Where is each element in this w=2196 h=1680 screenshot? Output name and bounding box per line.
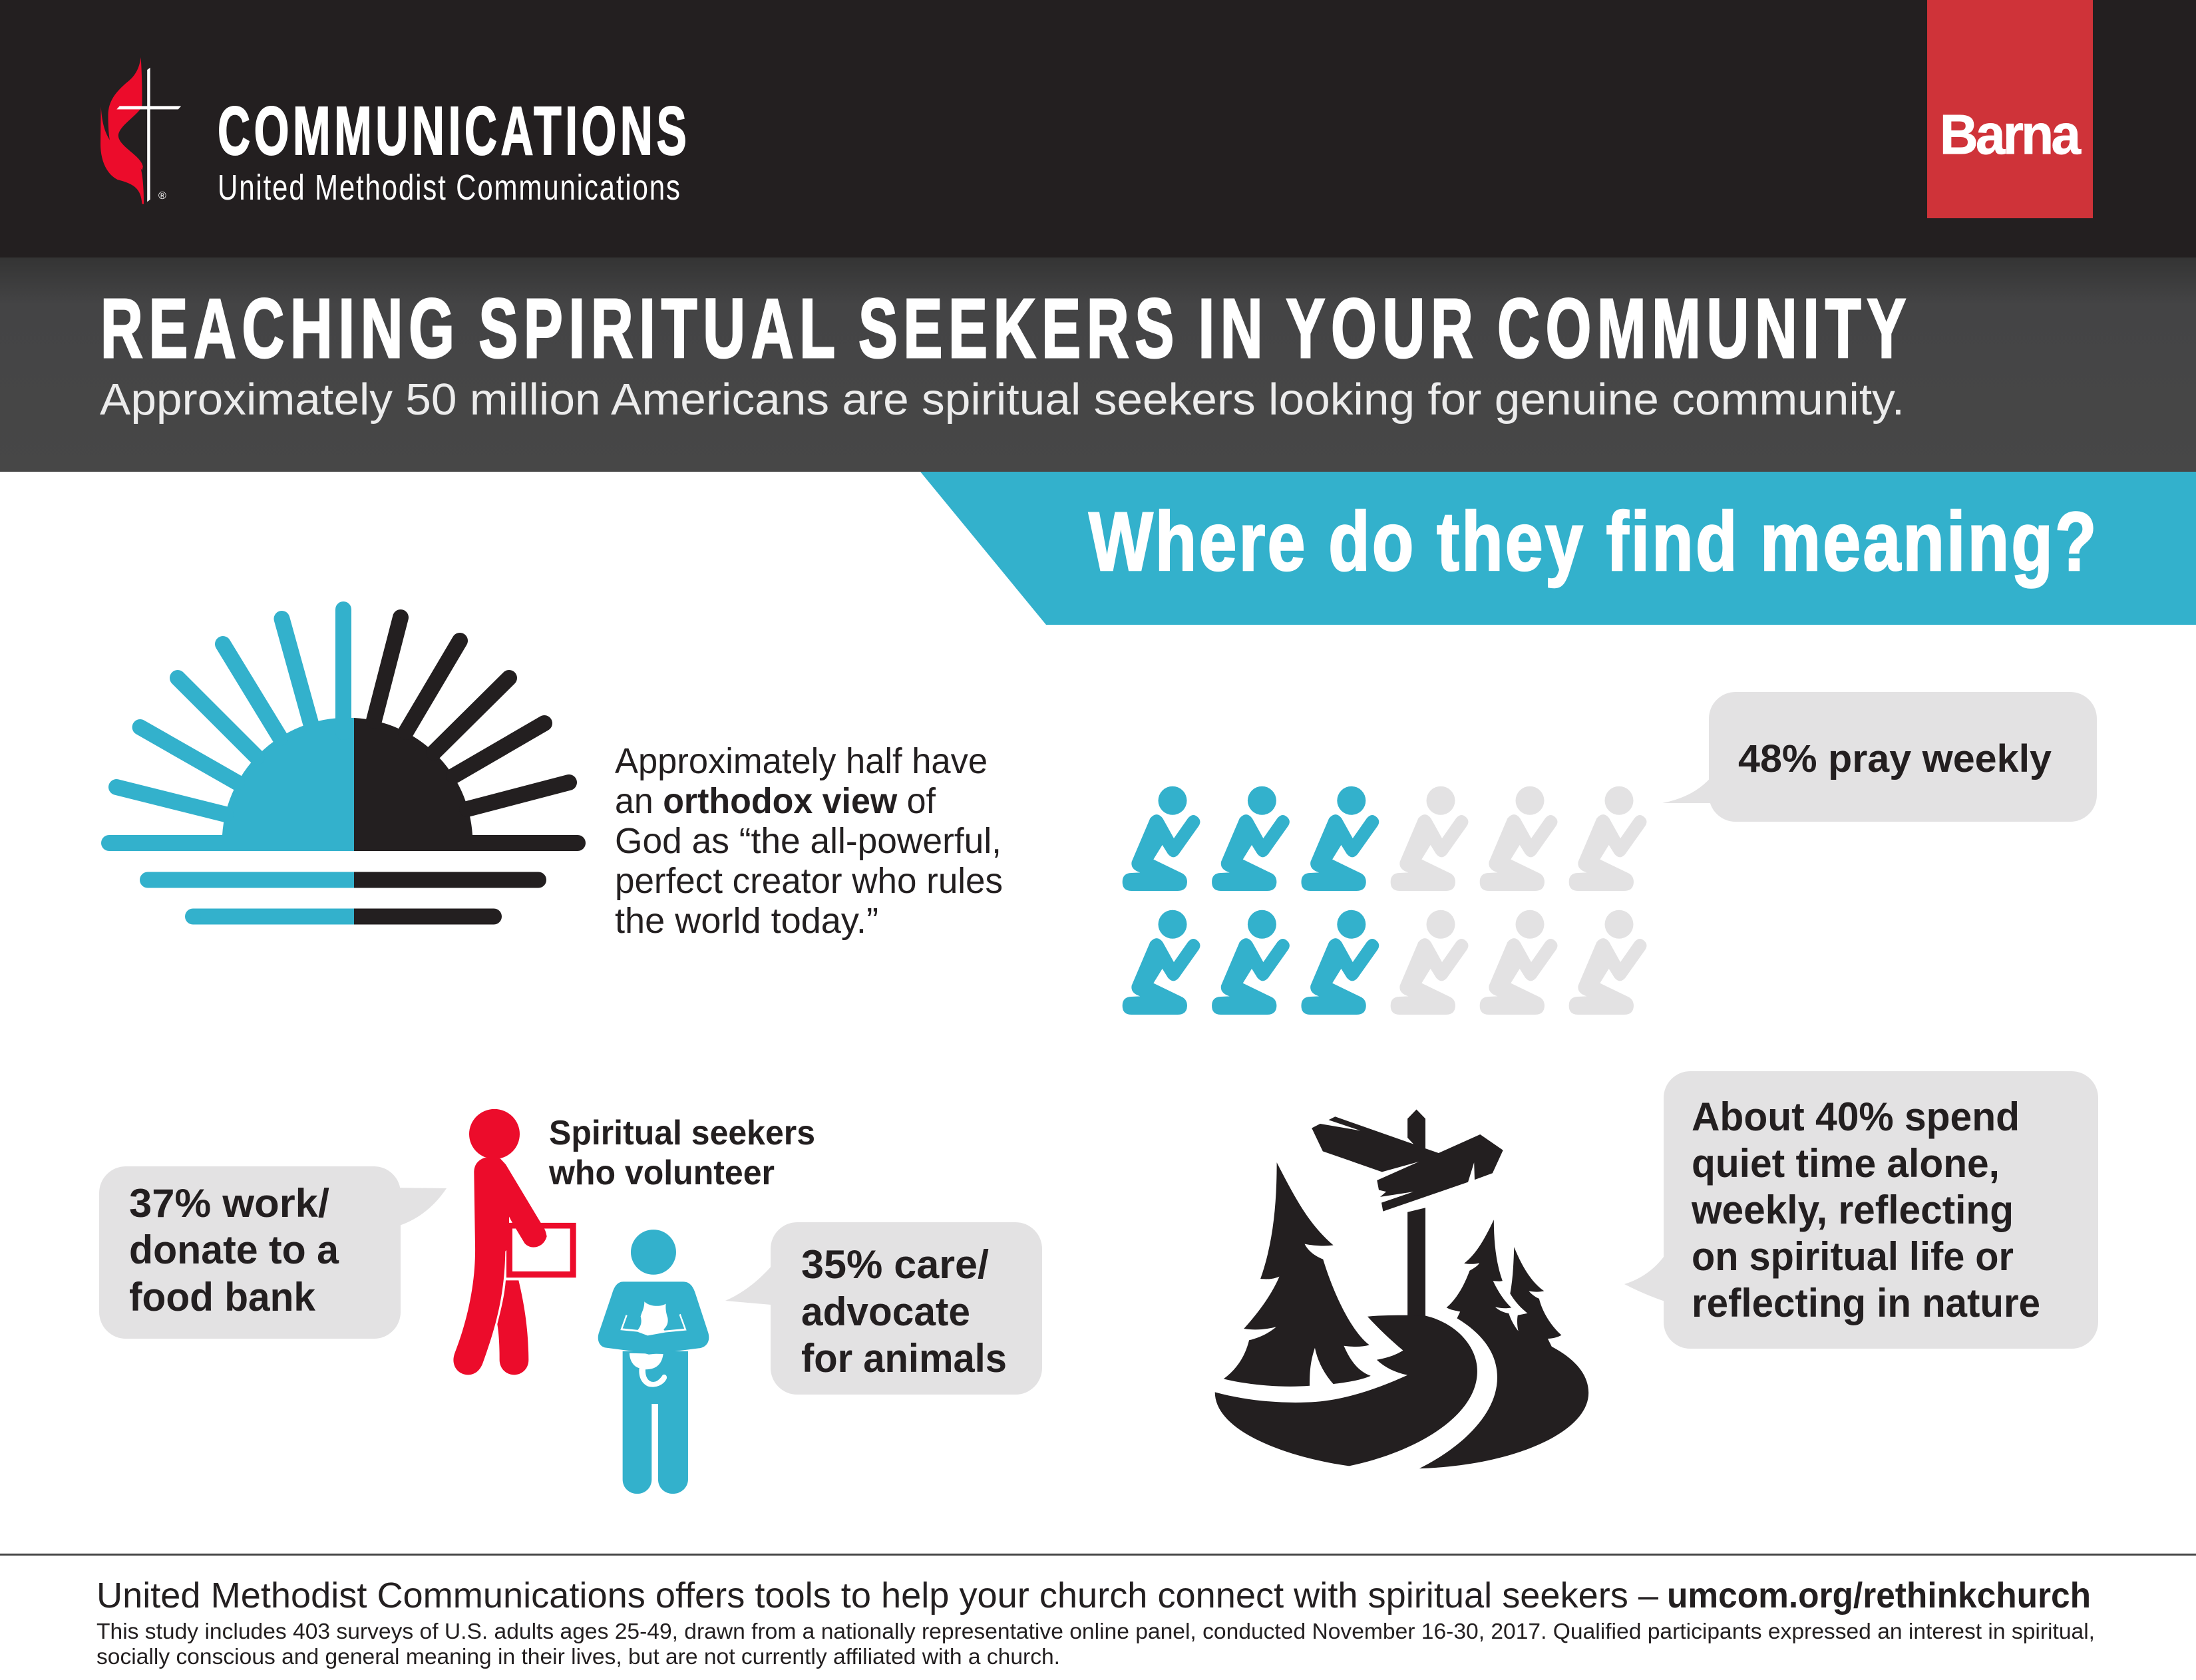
footnote bbox=[96, 1619, 2095, 1669]
footer link: umcom.org/rethinkchurch bbox=[1667, 1576, 2091, 1615]
callout: 40% quiet time: on spiritual life or bbox=[1692, 1234, 2014, 1279]
heading: seekers who volunteer: Spiritual seekers bbox=[549, 1114, 815, 1152]
title band bbox=[0, 257, 2196, 472]
callout: 37% food bank: donate to a bbox=[129, 1228, 339, 1272]
heading: seekers who volunteer: who volunteer bbox=[548, 1154, 775, 1192]
footer bbox=[0, 1554, 2196, 1669]
footnote: This study includes 403 surveys of U.S. adults ages 25-49, drawn from a nationally representative online panel, conducted November 16-30, 2017. Qualified participants expressed an interest in spiritual, bbox=[96, 1619, 2095, 1643]
callout: 35% animals: for animals bbox=[801, 1336, 1007, 1381]
Barna badge: Barna bbox=[1940, 104, 2082, 166]
text block: orthodox view of God: Approximately half have bbox=[615, 741, 988, 781]
text block: orthodox view of God bbox=[615, 741, 1003, 941]
callout: 40% quiet time: About 40% spend bbox=[1692, 1094, 2020, 1139]
footnote: socially conscious and general meaning in their lives, but are not currently affiliated with a church. bbox=[96, 1644, 1060, 1669]
callout: 35% animals: 35% care/ bbox=[801, 1242, 989, 1287]
icon: half teal half black sun bbox=[101, 609, 586, 925]
header bar bbox=[0, 0, 2196, 257]
callout: 37% food bank: 37% work/ bbox=[129, 1181, 329, 1226]
callout: 35% animals: advocate bbox=[801, 1289, 970, 1334]
icon: red volunteer with box bbox=[453, 1109, 576, 1375]
heading: seekers who volunteer bbox=[548, 1114, 815, 1192]
callout: 40% quiet time: weekly, reflecting bbox=[1691, 1188, 2014, 1232]
footer call to action: United Methodist Communications offers tools to help your church connect with spiritual seekers – bbox=[96, 1576, 1658, 1615]
callout: 40% quiet time bbox=[1624, 1071, 2098, 1349]
organisation name: COMMUNICATIONS bbox=[218, 93, 687, 169]
title: REACHING SPIRITUAL SEEKERS IN YOUR COMMUNITY bbox=[100, 283, 1906, 376]
Barna badge bbox=[1927, 0, 2093, 218]
callout: 37% food bank: food bank bbox=[129, 1275, 316, 1319]
section banner bbox=[920, 472, 2196, 625]
callout: 40% quiet time: reflecting in nature bbox=[1692, 1281, 2040, 1325]
icon: forest path and signpost bbox=[1215, 1110, 1588, 1468]
logo: cross and flame bbox=[100, 57, 181, 204]
registered mark: ® bbox=[158, 190, 166, 202]
pictogram: praying people, 48 percent bbox=[1123, 786, 1646, 1015]
callout: 48% pray weekly: 48% pray weekly bbox=[1738, 737, 2052, 780]
text block: orthodox view of God: perfect creator who rules bbox=[615, 861, 1003, 901]
subtitle: Approximately 50 million Americans are spiritual seekers looking for genuine community. bbox=[100, 375, 1905, 424]
callout: 37% food bank bbox=[99, 1166, 447, 1339]
callout: 40% quiet time: quiet time alone, bbox=[1692, 1141, 2000, 1186]
callout: 35% animals bbox=[725, 1222, 1042, 1395]
text block: orthodox view of God: the world today.” bbox=[615, 901, 878, 941]
text block: orthodox view of God: God as “the all-powerful, bbox=[615, 821, 1002, 861]
icon: teal volunteer holding cat bbox=[598, 1230, 709, 1494]
section banner: Where do they find meaning? bbox=[1089, 496, 2097, 588]
callout: 48% pray weekly bbox=[1662, 692, 2097, 822]
organisation subtitle: United Methodist Communications bbox=[218, 168, 680, 208]
text block: orthodox view of God: an orthodox view of bbox=[615, 781, 936, 821]
